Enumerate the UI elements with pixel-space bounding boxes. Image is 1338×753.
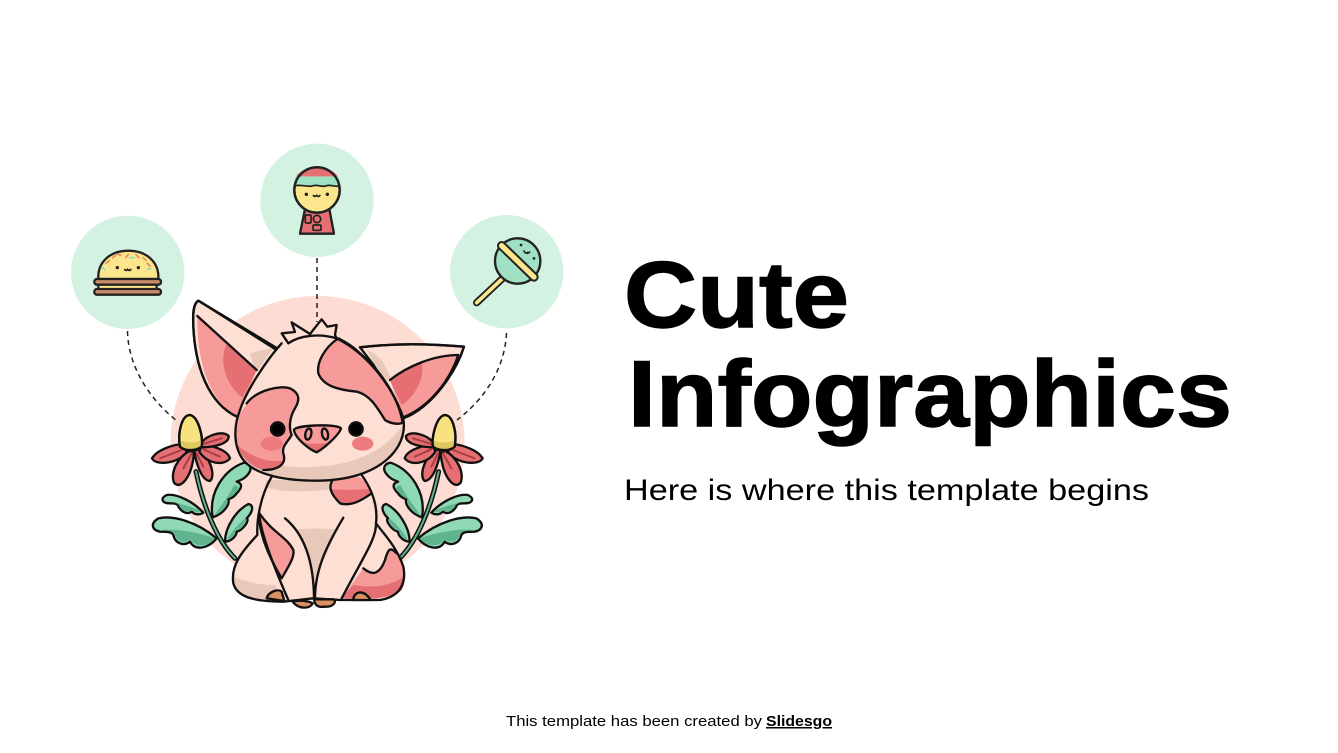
icon: gumball machine xyxy=(294,167,340,234)
body outline xyxy=(233,475,404,602)
icon: burger xyxy=(94,251,161,295)
flower petals xyxy=(152,433,230,485)
icon: lollipop xyxy=(477,238,540,303)
leg spot xyxy=(259,513,294,578)
back spot xyxy=(342,549,404,599)
paws xyxy=(267,590,371,608)
subtitle: Here is where this template begins xyxy=(624,474,1149,507)
flower stem xyxy=(196,472,235,558)
icon circle: lollipop xyxy=(450,215,563,328)
head outline xyxy=(235,338,404,481)
illustration: pig with flowers xyxy=(152,301,483,608)
flower bud xyxy=(179,415,202,450)
dashed connectors xyxy=(128,258,506,421)
chest spot xyxy=(330,477,372,504)
pig background circle xyxy=(170,296,464,590)
left ear xyxy=(193,301,280,417)
right face spot xyxy=(318,338,403,424)
hair tuft xyxy=(282,319,337,343)
belly shadow xyxy=(296,529,337,587)
right flower xyxy=(382,415,483,558)
left flower xyxy=(152,415,252,558)
icon circle: burger xyxy=(71,216,184,329)
flower leaves xyxy=(153,463,252,548)
footer credit: This template has been created by xyxy=(506,713,763,730)
front leg lines xyxy=(259,513,376,600)
left face spot xyxy=(235,387,298,470)
cheeks xyxy=(261,437,283,451)
title: Infographics xyxy=(628,341,1232,446)
title: Cute xyxy=(624,242,849,347)
snout xyxy=(294,425,341,452)
right ear xyxy=(360,344,464,418)
pig head xyxy=(235,319,404,481)
icon circle: gumball machine xyxy=(260,144,374,257)
footer credit: Slidesgo xyxy=(766,713,832,730)
pig body xyxy=(233,475,404,608)
eyes xyxy=(271,422,284,436)
title xyxy=(624,242,1232,446)
